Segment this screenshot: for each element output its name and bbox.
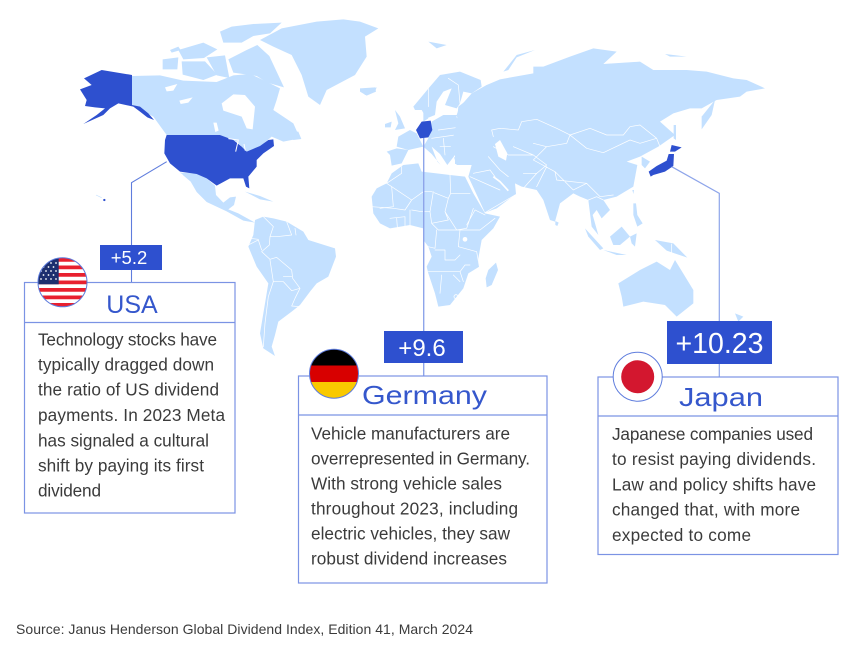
body text: Japanese companies used (612, 424, 813, 444)
body text: overrepresented in Germany. (311, 448, 530, 468)
body text: electric vehicles, they saw (311, 524, 511, 544)
map: asia and oceania (428, 42, 765, 322)
body text: With strong vehicle sales (311, 474, 502, 494)
value badge: +10.23 (676, 328, 763, 360)
body text: shift by paying its first (38, 456, 204, 476)
connector: USA (132, 162, 167, 282)
connector: Germany (423, 138, 425, 376)
card outline (24, 282, 235, 513)
map: europe (362, 72, 540, 166)
icon: Germany highlighted (416, 121, 432, 138)
body text: to resist paying dividends. (612, 449, 816, 469)
source note: Source: Janus Henderson Global Dividend Index, Edition 41, March 2024 (16, 621, 473, 637)
panel: Germany (298, 331, 547, 583)
value badge (667, 321, 772, 364)
body text: dividend (38, 480, 101, 500)
icon: US flag (38, 258, 87, 307)
body text: typically dragged down (38, 354, 214, 374)
header divider (598, 415, 838, 417)
value badge: +5.2 (111, 247, 147, 268)
header divider (24, 322, 235, 324)
panel: USA (24, 245, 235, 513)
map: south america (248, 217, 336, 356)
heading: Germany (362, 380, 487, 410)
body text: Law and policy shifts have (612, 474, 816, 494)
icon: Japanese flag (613, 352, 662, 401)
body text: expected to come (612, 525, 751, 545)
card outline (298, 376, 547, 583)
connector: Japan (672, 167, 719, 377)
value badge: +9.6 (398, 335, 446, 362)
header divider (298, 414, 547, 416)
body text: throughout 2023, including (311, 498, 518, 518)
icon: German flag (309, 349, 359, 399)
panel: Japan (598, 321, 838, 554)
body text: Vehicle manufacturers are (311, 424, 510, 444)
body text: the ratio of US dividend (38, 380, 219, 400)
value badge (100, 245, 162, 270)
world map (80, 19, 765, 356)
heading: Japan (679, 382, 763, 412)
map: africa (372, 163, 500, 307)
body text: Technology stocks have (38, 330, 217, 350)
card outline (598, 377, 838, 554)
body text: robust dividend increases (311, 548, 507, 568)
heading: USA (106, 291, 158, 319)
map: north america (80, 19, 378, 223)
body text: changed that, with more (612, 500, 800, 520)
value badge (384, 331, 463, 363)
body text: payments. In 2023 Meta (38, 405, 225, 425)
body text: has signaled a cultural (38, 430, 209, 450)
